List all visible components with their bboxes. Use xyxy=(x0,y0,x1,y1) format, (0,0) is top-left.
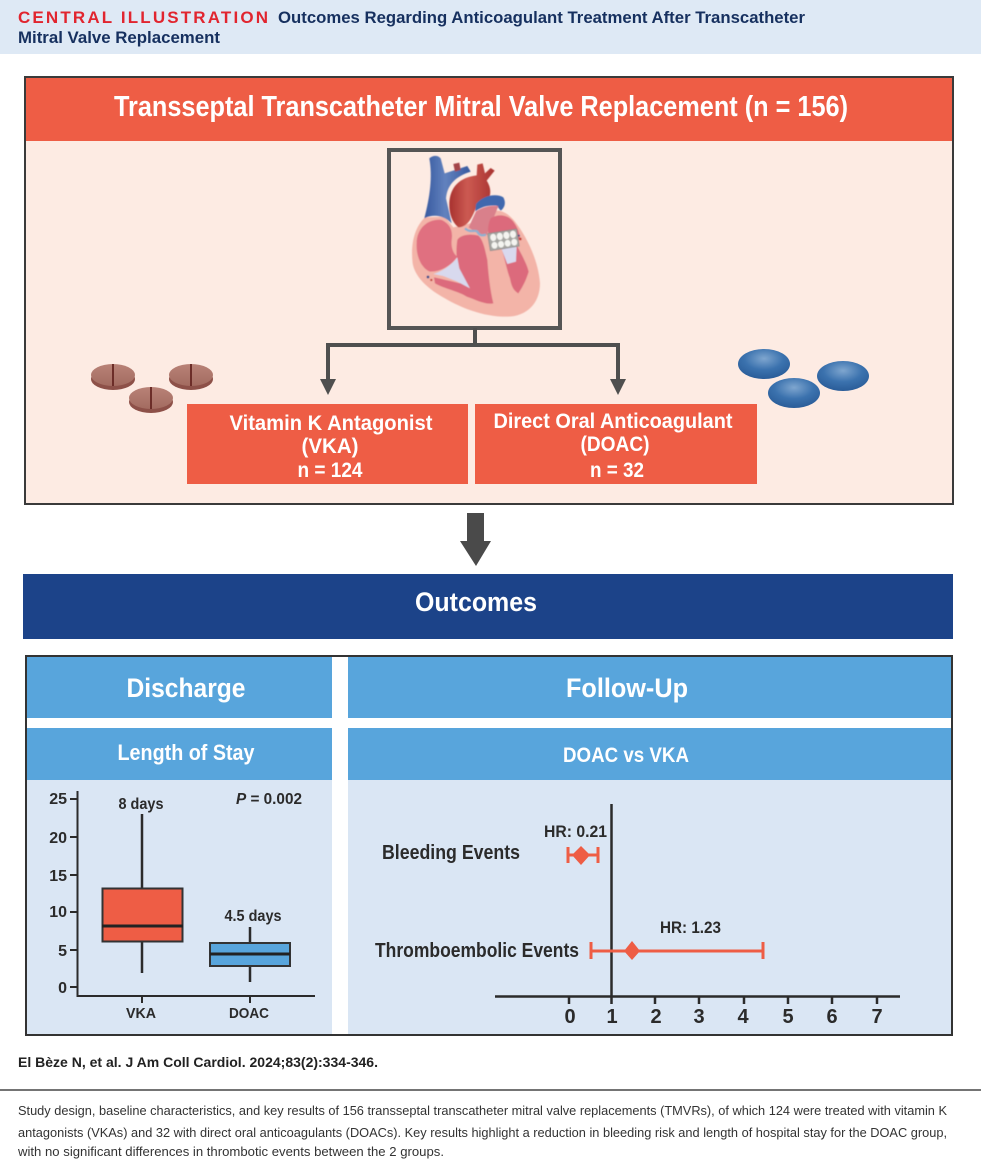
caption text: Study design, baseline characteristics, and key results of 156 transseptal transcatheter mitral valve replacements (TMVRs), of which 124 were treated with vitamin K xyxy=(18,1104,948,1118)
arrow: split connector to VKA and DOAC xyxy=(320,328,626,395)
x axis labels xyxy=(564,1006,883,1028)
box: DOAC group: (DOAC) xyxy=(580,433,650,456)
bleeding events row: HR: 0.21 xyxy=(544,822,607,841)
caption text xyxy=(17,1104,948,1159)
heading: follow-up xyxy=(348,657,951,718)
subheading: length of stay xyxy=(27,728,332,780)
bleeding events row xyxy=(382,822,607,865)
chart: length of stay box plot: VKA xyxy=(126,1005,156,1022)
y axis labels: 10 xyxy=(49,904,67,921)
panel heading text: Transseptal Transcatheter Mitral Valve Replacement (n = 156) xyxy=(114,91,848,123)
x axis labels: 7 xyxy=(871,1006,883,1028)
chart: length of stay box plot: P = 0.002 xyxy=(236,791,302,808)
box: VKA group: n = 124 xyxy=(298,459,363,482)
icon: brown VKA pills xyxy=(91,364,213,413)
y axis labels: 20 xyxy=(49,830,67,847)
box: VKA group: Vitamin K Antagonist xyxy=(230,412,432,435)
VKA box xyxy=(102,814,183,973)
header title line 2: Mitral Valve Replacement xyxy=(18,28,220,47)
box: VKA group xyxy=(187,404,468,484)
arrow: down to outcomes xyxy=(460,513,491,566)
y and x axes xyxy=(70,791,315,1003)
x axis labels: 1 xyxy=(606,1006,618,1028)
panel heading bar xyxy=(26,78,952,141)
value labels: 8 days xyxy=(118,796,164,813)
header banner xyxy=(0,0,981,54)
x axis labels: 5 xyxy=(782,1006,794,1028)
header title line 1: Outcomes Regarding Anticoagulant Treatment After Transcatheter xyxy=(278,8,805,27)
y axis labels: 25 xyxy=(49,791,67,808)
chart: length of stay box plot: 4.5 days xyxy=(224,908,282,925)
heart image frame xyxy=(389,150,560,328)
heading: discharge: Discharge xyxy=(126,673,246,703)
box: DOAC group: n = 32 xyxy=(590,459,644,482)
subheading: length of stay: Length of Stay xyxy=(118,740,255,765)
box: VKA group: (VKA) xyxy=(302,435,358,458)
DOAC box xyxy=(210,927,290,982)
x axis labels: 3 xyxy=(693,1006,705,1028)
heading: follow-up: Follow-Up xyxy=(566,673,688,703)
header label: central illustration: CENTRAL ILLUSTRATION xyxy=(18,8,268,27)
y axis labels: 0 xyxy=(58,980,67,997)
icon: heart illustration xyxy=(412,156,540,317)
axes xyxy=(495,804,900,1004)
chart: length of stay box plot xyxy=(49,791,315,1022)
x axis labels: 0 xyxy=(564,1006,576,1028)
x axis labels: 6 xyxy=(826,1006,838,1028)
x axis labels: 2 xyxy=(650,1006,662,1028)
y axis labels: 15 xyxy=(49,868,67,885)
thromboembolic events row xyxy=(375,918,763,962)
bleeding events row: Bleeding Events xyxy=(382,842,520,864)
x axis labels: 4 xyxy=(737,1006,749,1028)
caption text: antagonists (VKAs) and 32 with direct oral anticoagulants (DOACs). Key results highlight a reduction in bleeding risk and length of hospital stay for the DOAC group, xyxy=(18,1126,947,1140)
y axis labels: 5 xyxy=(58,943,67,960)
panel: outcomes frame xyxy=(26,656,952,1035)
citation: El Bèze N, et al. J Am Coll Cardiol. 2024;83(2):334-346. xyxy=(18,1055,378,1070)
heading: outcomes xyxy=(23,574,953,639)
heading: discharge xyxy=(27,657,332,718)
chart: hazard ratio forest plot xyxy=(375,804,900,1028)
caption text: with no significant differences in thrombotic events between the 2 groups. xyxy=(17,1145,444,1159)
thromboembolic events row: HR: 1.23 xyxy=(660,918,721,937)
box: DOAC group xyxy=(475,404,757,484)
y axis labels xyxy=(49,791,67,997)
heading: outcomes: Outcomes xyxy=(415,587,537,617)
subheading: DOAC vs VKA xyxy=(348,728,951,780)
subheading: DOAC vs VKA: DOAC vs VKA xyxy=(563,744,689,767)
panel: study design xyxy=(25,77,953,504)
thromboembolic events row: Thromboembolic Events xyxy=(375,940,579,962)
chart: length of stay box plot: DOAC xyxy=(229,1005,269,1022)
box: DOAC group: Direct Oral Anticoagulant xyxy=(494,410,732,433)
icon: blue DOAC pills xyxy=(738,349,869,408)
